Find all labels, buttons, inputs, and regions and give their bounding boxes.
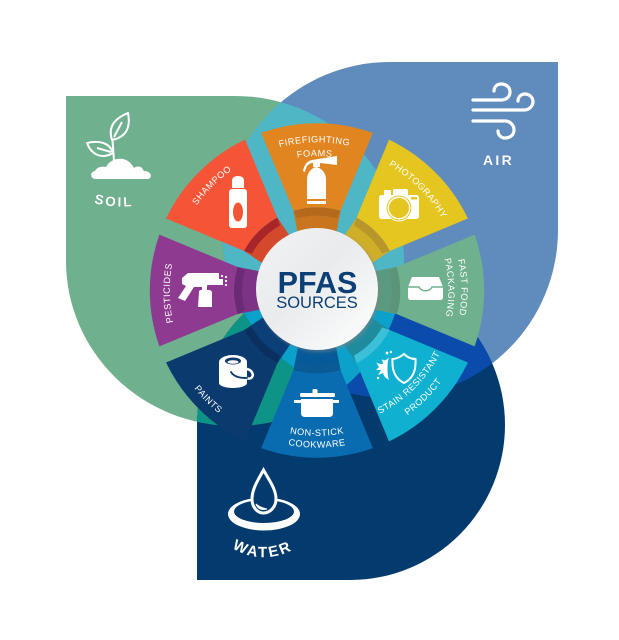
icon: fire extinguisher bbox=[303, 156, 337, 204]
icon: cooking pot bbox=[294, 389, 339, 417]
segment: firefighting foams: FIREFIGHTING bbox=[278, 136, 350, 147]
segment: firefighting foams bbox=[261, 123, 373, 232]
segment: photography: PHOTOGRAPHY bbox=[389, 160, 448, 216]
segment: non-stick cookware: NON-STICK bbox=[290, 427, 344, 436]
center badge bbox=[256, 228, 380, 352]
overlap: soil and water bbox=[197, 313, 300, 426]
icon: shampoo bottle bbox=[229, 176, 247, 228]
segment: fast food packaging: FAST FOOD bbox=[458, 259, 468, 315]
segment: shampoo bbox=[166, 140, 289, 263]
segment: fast food packaging: PACKAGING bbox=[444, 258, 455, 316]
segment: firefighting foams: FOAMS bbox=[297, 150, 332, 158]
icon: soil sprout bbox=[87, 113, 151, 179]
segment: pesticides: PESTICIDES bbox=[163, 264, 173, 323]
icon: air wind bbox=[473, 84, 533, 138]
segment: photography bbox=[345, 140, 468, 263]
heading: PFAS: PFAS bbox=[278, 266, 357, 300]
subheading: sources: SOURCES bbox=[276, 294, 358, 312]
icon: spray gun bbox=[178, 273, 227, 307]
chart: PFAS sources wheel bbox=[150, 123, 484, 458]
segment: non-stick cookware bbox=[261, 347, 373, 458]
panel: soil background shape bbox=[66, 96, 404, 426]
segment: stain resistant product bbox=[344, 318, 468, 442]
segment: paints: PAINTS bbox=[194, 385, 222, 412]
panel: air background shape bbox=[222, 62, 558, 398]
label: air: AIR bbox=[483, 152, 514, 168]
icon: shield and splash bbox=[376, 351, 416, 383]
segment: fast food packaging bbox=[374, 234, 484, 346]
segment: stain resistant product: PRODUCT bbox=[404, 378, 440, 415]
icon: camera bbox=[379, 189, 419, 222]
segment: shampoo: SHAMPOO bbox=[192, 166, 230, 204]
icon: paint bucket bbox=[219, 355, 253, 388]
segment: paints bbox=[166, 318, 290, 426]
segment: non-stick cookware: COOKWARE bbox=[289, 439, 345, 448]
overlap: air and water bbox=[244, 298, 492, 397]
segment: stain resistant product: STAIN RESISTANT bbox=[378, 350, 439, 413]
overlap: soil and air bbox=[222, 102, 404, 313]
icon: water drop with ripple bbox=[228, 470, 300, 530]
panel: water background shape bbox=[197, 270, 505, 580]
label: soil: SOIL bbox=[94, 194, 132, 207]
segment: pesticides bbox=[150, 234, 260, 346]
label: water: WATER bbox=[234, 539, 292, 558]
overlap: soil, air and water bbox=[244, 278, 400, 385]
icon: food box bbox=[408, 277, 443, 300]
